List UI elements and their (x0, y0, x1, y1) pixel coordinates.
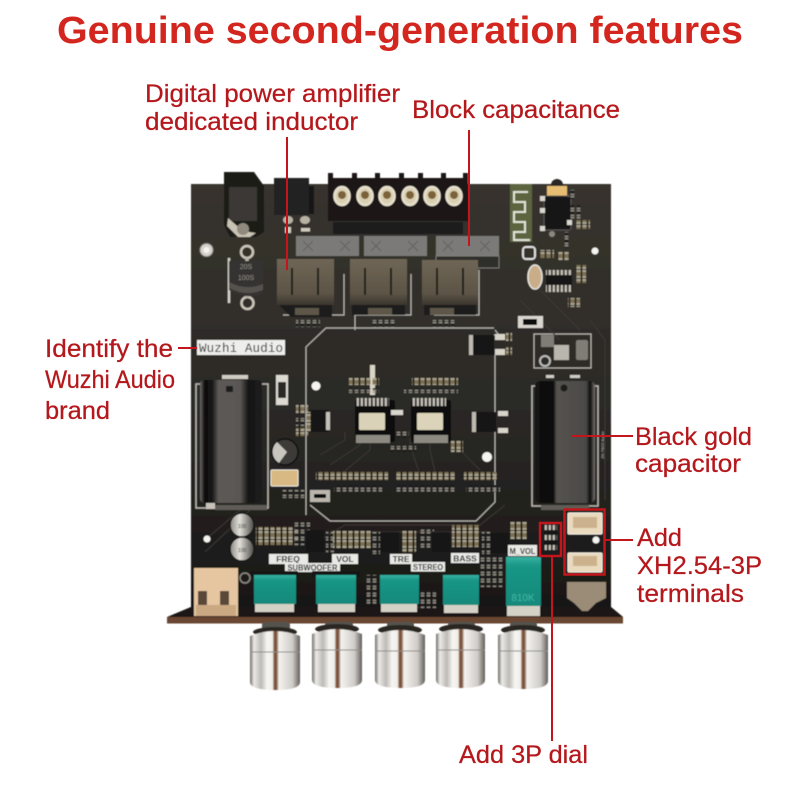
callout: Wuzhi Audio brand: brand (45, 397, 110, 425)
PCB base (167, 184, 623, 623)
callout: Wuzhi Audio brand (45, 335, 197, 425)
callout: digital power amplifier inductor: dedicated inductor (145, 108, 358, 136)
silkscreen control labels: M_VOL (510, 546, 536, 556)
potentiometers: 810K (511, 593, 535, 604)
audio module silk block (540, 335, 588, 366)
callout: black gold capacitor (572, 423, 752, 478)
circuit board product photo (167, 172, 623, 690)
callout: black gold capacitor: capacitor (635, 450, 741, 478)
silkscreen control labels: FREQ (276, 554, 300, 564)
callout: XH2.54-3P terminals: XH2.54-3P (637, 552, 762, 580)
callout: Wuzhi Audio brand: Wuzhi Audio (45, 366, 175, 394)
front panel strip (167, 607, 623, 623)
amplifier chips (349, 365, 463, 452)
bluetooth antenna (510, 184, 532, 242)
circuit traces (205, 290, 605, 552)
small parts beside left capacitor (271, 375, 330, 498)
Wuzhi Audio label: Wuzhi Audio (199, 342, 283, 356)
lower control circuitry (256, 522, 528, 608)
callout: digital power amplifier inductor: Digital power amplifier (145, 80, 400, 108)
small two-pin connector (274, 178, 314, 233)
silkscreen control labels: STEREO (413, 562, 443, 572)
mounting holes (204, 248, 598, 542)
chrome knobs (250, 622, 548, 690)
callout: digital power amplifier inductor (145, 80, 400, 270)
electrolytic capacitors: 100 (238, 548, 247, 554)
electrolytic capacitors (230, 513, 254, 561)
chips and parts near bluetooth (518, 190, 590, 328)
USB-style connector (194, 568, 250, 616)
callout: 3P dial (459, 523, 588, 769)
3P dial switch (544, 525, 557, 551)
side connector (567, 582, 606, 611)
callout: XH2.54-3P terminals: Add (637, 524, 682, 552)
silkscreen control labels (269, 545, 537, 572)
right black gold capacitor: ZK-TB22 Audio (600, 431, 605, 459)
XH2.54 white terminals (568, 513, 602, 572)
right black gold capacitor (532, 375, 605, 510)
power transistors (306, 333, 512, 433)
inductors (277, 259, 478, 327)
diode: 100S (238, 275, 254, 282)
mounting hole (200, 244, 213, 256)
smd component rows (310, 472, 500, 502)
silkscreen control labels: SUBWOOFER (288, 562, 338, 572)
potentiometers (250, 557, 541, 616)
silkscreen control labels: VOL (336, 554, 354, 564)
silkscreen control labels: TRE (392, 554, 410, 564)
board silkscreen outlines (283, 270, 591, 521)
title: Genuine second-generation features (57, 10, 743, 52)
callout: XH2.54-3P terminals: terminals (637, 580, 744, 608)
callout: block capacitance: Block capacitance (412, 96, 620, 124)
callout: black gold capacitor: Black gold (635, 423, 752, 451)
diode: 20S (240, 264, 253, 271)
electrolytic capacitors: 100 (238, 524, 247, 530)
block capacitors (296, 236, 499, 268)
left black gold capacitor (196, 375, 268, 510)
silkscreen control labels: BASS (453, 554, 477, 564)
callout: XH2.54-3P terminals (564, 510, 762, 608)
callout: 3P dial: Add 3P dial (459, 741, 588, 769)
audio jack (540, 179, 572, 237)
diode (229, 246, 263, 309)
callout: Wuzhi Audio brand: Identify the (45, 335, 173, 363)
screw terminal block (328, 173, 468, 234)
DC power jack (224, 172, 264, 237)
